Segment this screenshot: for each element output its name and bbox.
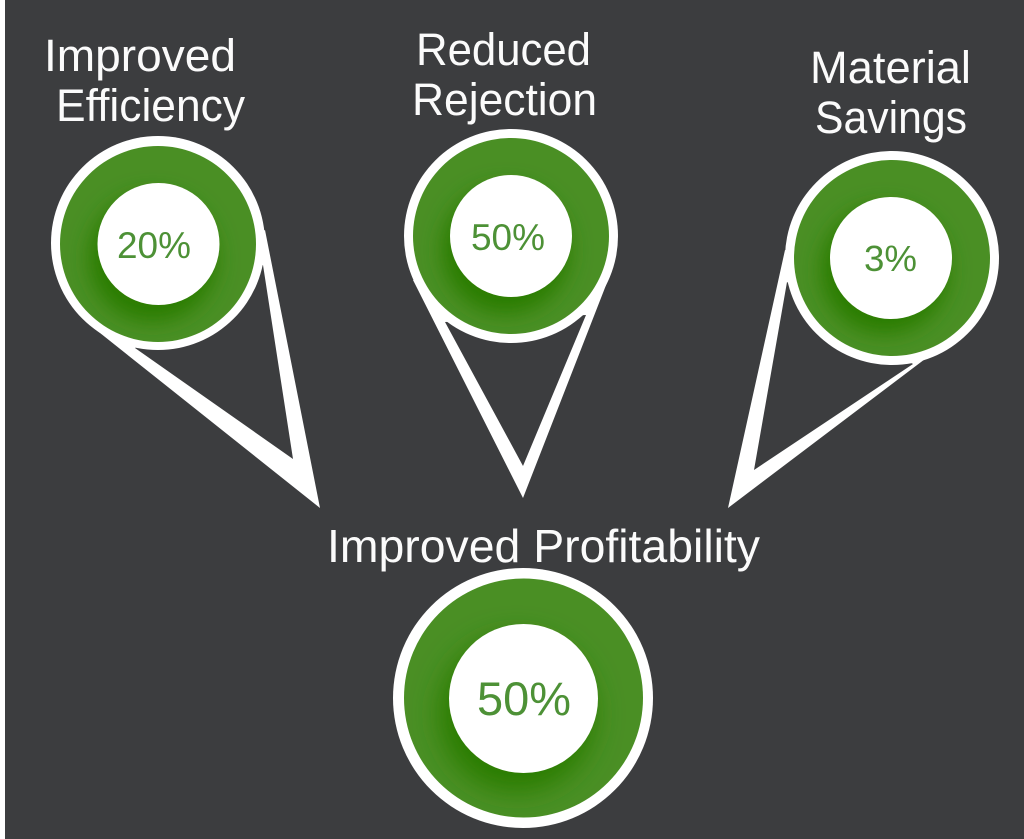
- pointer: rejection tail: [413, 280, 608, 498]
- icon: savings ring: [785, 151, 999, 365]
- heading: material savings: Savings: [815, 92, 967, 143]
- heading: material savings: [810, 42, 971, 143]
- heading: reduced rejection: Reduced: [416, 24, 591, 75]
- heading: improved profitability: Improved Profitability: [327, 520, 760, 572]
- panel: material savings: [728, 42, 999, 508]
- pointer: efficiency tail: [90, 230, 320, 508]
- value: 3%: 3%: [864, 238, 917, 279]
- value: 50% reduced rejection: 50%: [471, 217, 545, 258]
- icon: profitability ring: [393, 568, 653, 828]
- value: 50% profitability: 50%: [477, 672, 571, 725]
- panel: improved efficiency: [44, 30, 320, 508]
- heading: reduced rejection: [412, 24, 597, 125]
- icon: rejection ring: [404, 129, 618, 343]
- left edge strip: [0, 0, 5, 839]
- panel: improved profitability: [327, 520, 760, 828]
- heading: improved efficiency: [44, 30, 245, 131]
- heading: reduced rejection: Rejection: [412, 74, 597, 125]
- icon: efficiency ring: [51, 136, 265, 350]
- pointer: savings tail: [728, 250, 970, 508]
- heading: improved efficiency: Improved: [44, 30, 236, 81]
- value: 20%: 20%: [117, 225, 191, 266]
- heading: improved efficiency: Efficiency: [56, 80, 245, 131]
- heading: material savings: Material: [810, 42, 971, 93]
- panel: reduced rejection: [404, 24, 618, 498]
